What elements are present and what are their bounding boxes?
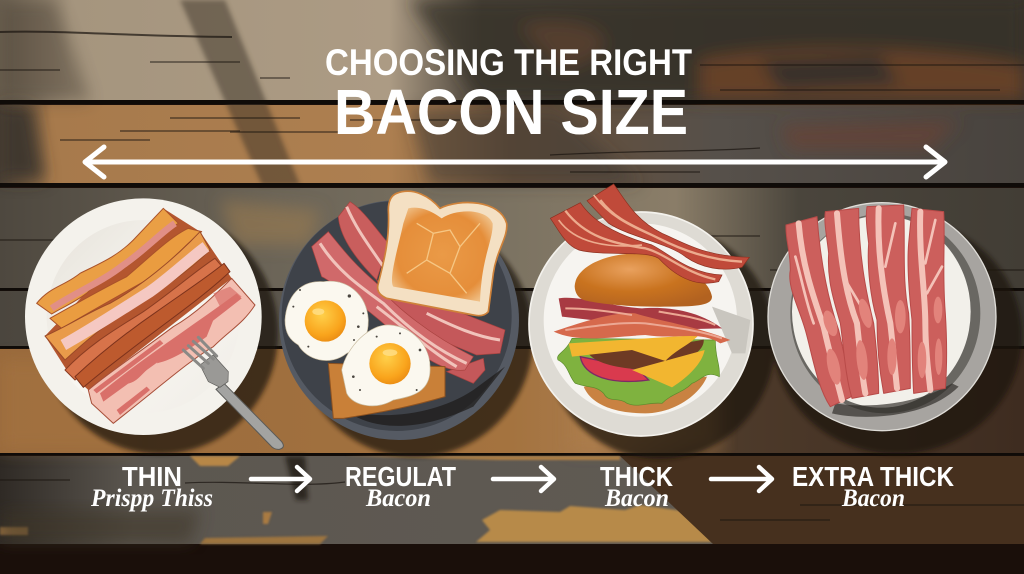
label: regular: Bacon — [365, 485, 431, 512]
title — [325, 42, 692, 148]
label: thick — [600, 461, 673, 512]
fried egg bottom — [342, 325, 430, 406]
label: regular — [345, 461, 456, 512]
label: thin — [90, 461, 213, 512]
regular bacon strips — [312, 202, 505, 383]
double-headed size arrow — [85, 147, 945, 177]
fork — [183, 337, 283, 449]
plate 1: thin crispy bacon — [25, 198, 283, 449]
thin bacon strips — [37, 208, 255, 423]
plate 3: thick bacon burger — [529, 184, 753, 436]
arrow: thin to regular — [251, 467, 310, 491]
bottom bun — [584, 377, 707, 413]
extra thick strips — [786, 205, 947, 407]
label: thick: THICK — [600, 461, 673, 492]
title line one: CHOOSING THE RIGHT — [325, 42, 692, 83]
arrow: regular to thick — [493, 467, 554, 491]
middle bacon — [554, 298, 730, 343]
toast slice — [378, 191, 507, 316]
label: thin: Prispp Thiss — [90, 485, 213, 512]
plate 4: extra thick bacon — [768, 203, 996, 431]
label: extra thick: EXTRA THICK — [792, 461, 954, 492]
beef patty — [587, 339, 704, 370]
top bacon strips — [550, 184, 749, 283]
arrow: thick to extra thick — [711, 467, 772, 491]
label: thin: THIN — [122, 461, 182, 492]
white plate — [529, 212, 753, 436]
white plate — [25, 198, 262, 435]
grey plate — [768, 203, 996, 431]
dark plate — [279, 200, 519, 440]
cheese slices — [569, 335, 705, 387]
title line two: BACON SIZE — [334, 76, 688, 148]
plate 2: regular bacon breakfast — [279, 191, 519, 440]
lettuce — [558, 338, 719, 405]
plate shadows — [42, 212, 1022, 459]
onion and tomato — [580, 357, 649, 381]
top bun — [575, 253, 712, 307]
label: extra thick — [792, 461, 954, 512]
label: regular: REGULAT — [345, 461, 456, 492]
fried egg top — [285, 281, 445, 418]
label: thick: Bacon — [604, 485, 669, 512]
label: extra thick: Bacon — [841, 485, 905, 512]
